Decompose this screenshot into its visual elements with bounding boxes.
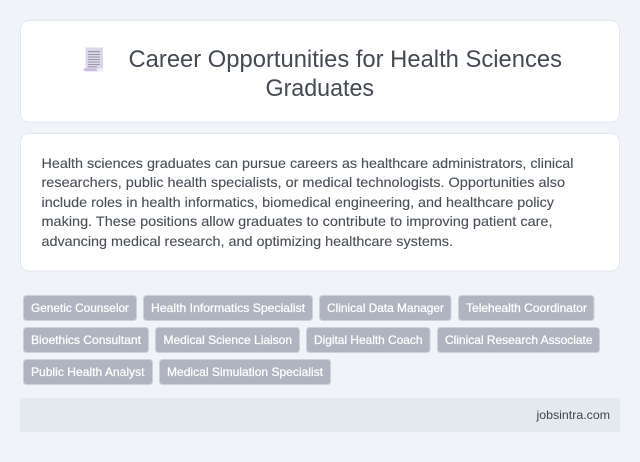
tag: Public Health Analyst: Public Health Analyst — [31, 365, 145, 379]
tag: Medical Science Liaison — [156, 328, 300, 352]
title: Career Opportunities for Health Sciences — [128, 46, 562, 73]
tag: Telehealth Coordinator — [458, 296, 594, 320]
tag: Clinical Research Associate — [438, 328, 600, 352]
text block: description — [42, 155, 574, 249]
tag: Telehealth Coordinator: Telehealth Coordinator — [466, 301, 587, 315]
footer: source: jobsintra.com — [535, 408, 610, 422]
tag: Bioethics Consultant — [24, 328, 148, 352]
title — [128, 46, 562, 102]
text block: description: researchers, public health specialists, or medical technologists. Opportunities also — [42, 174, 565, 190]
tag: Public Health Analyst — [24, 360, 152, 384]
text block: description: advancing medical research, and optimizing healthcare systems. — [42, 233, 453, 249]
tag: Bioethics Consultant: Bioethics Consultant — [31, 333, 142, 347]
tag: Medical Simulation Specialist: Medical Simulation Specialist — [167, 365, 324, 379]
text block: description: include roles in health informatics, biomedical engineering, and healthcare policy — [42, 194, 554, 210]
tag: Digital Health Coach — [306, 328, 430, 352]
tag: Clinical Data Manager: Clinical Data Manager — [327, 301, 444, 315]
icon: document scroll — [83, 48, 103, 72]
text block: description: Health sciences graduates can pursue careers as healthcare administrators, clinical — [42, 155, 574, 171]
tag: Health Informatics Specialist: Health Informatics Specialist — [151, 301, 306, 315]
panel: title card — [20, 20, 620, 122]
tag: Medical Science Liaison: Medical Science Liaison — [164, 333, 292, 347]
tag: Genetic Counselor — [24, 296, 136, 320]
tag: Digital Health Coach: Digital Health Coach — [314, 333, 422, 347]
text block: description: making. These positions allow graduates to contribute to improving patient care, — [42, 213, 552, 229]
footer bar — [20, 398, 620, 432]
tag: Clinical Data Manager — [320, 296, 451, 320]
title: Graduates — [266, 75, 374, 102]
tag: Health Informatics Specialist — [144, 296, 312, 320]
tags: career roles — [24, 296, 600, 384]
tag: Medical Simulation Specialist — [160, 360, 330, 384]
tag: Clinical Research Associate: Clinical Research Associate — [445, 333, 593, 347]
tag: Genetic Counselor: Genetic Counselor — [31, 301, 129, 315]
panel: description — [20, 134, 620, 271]
